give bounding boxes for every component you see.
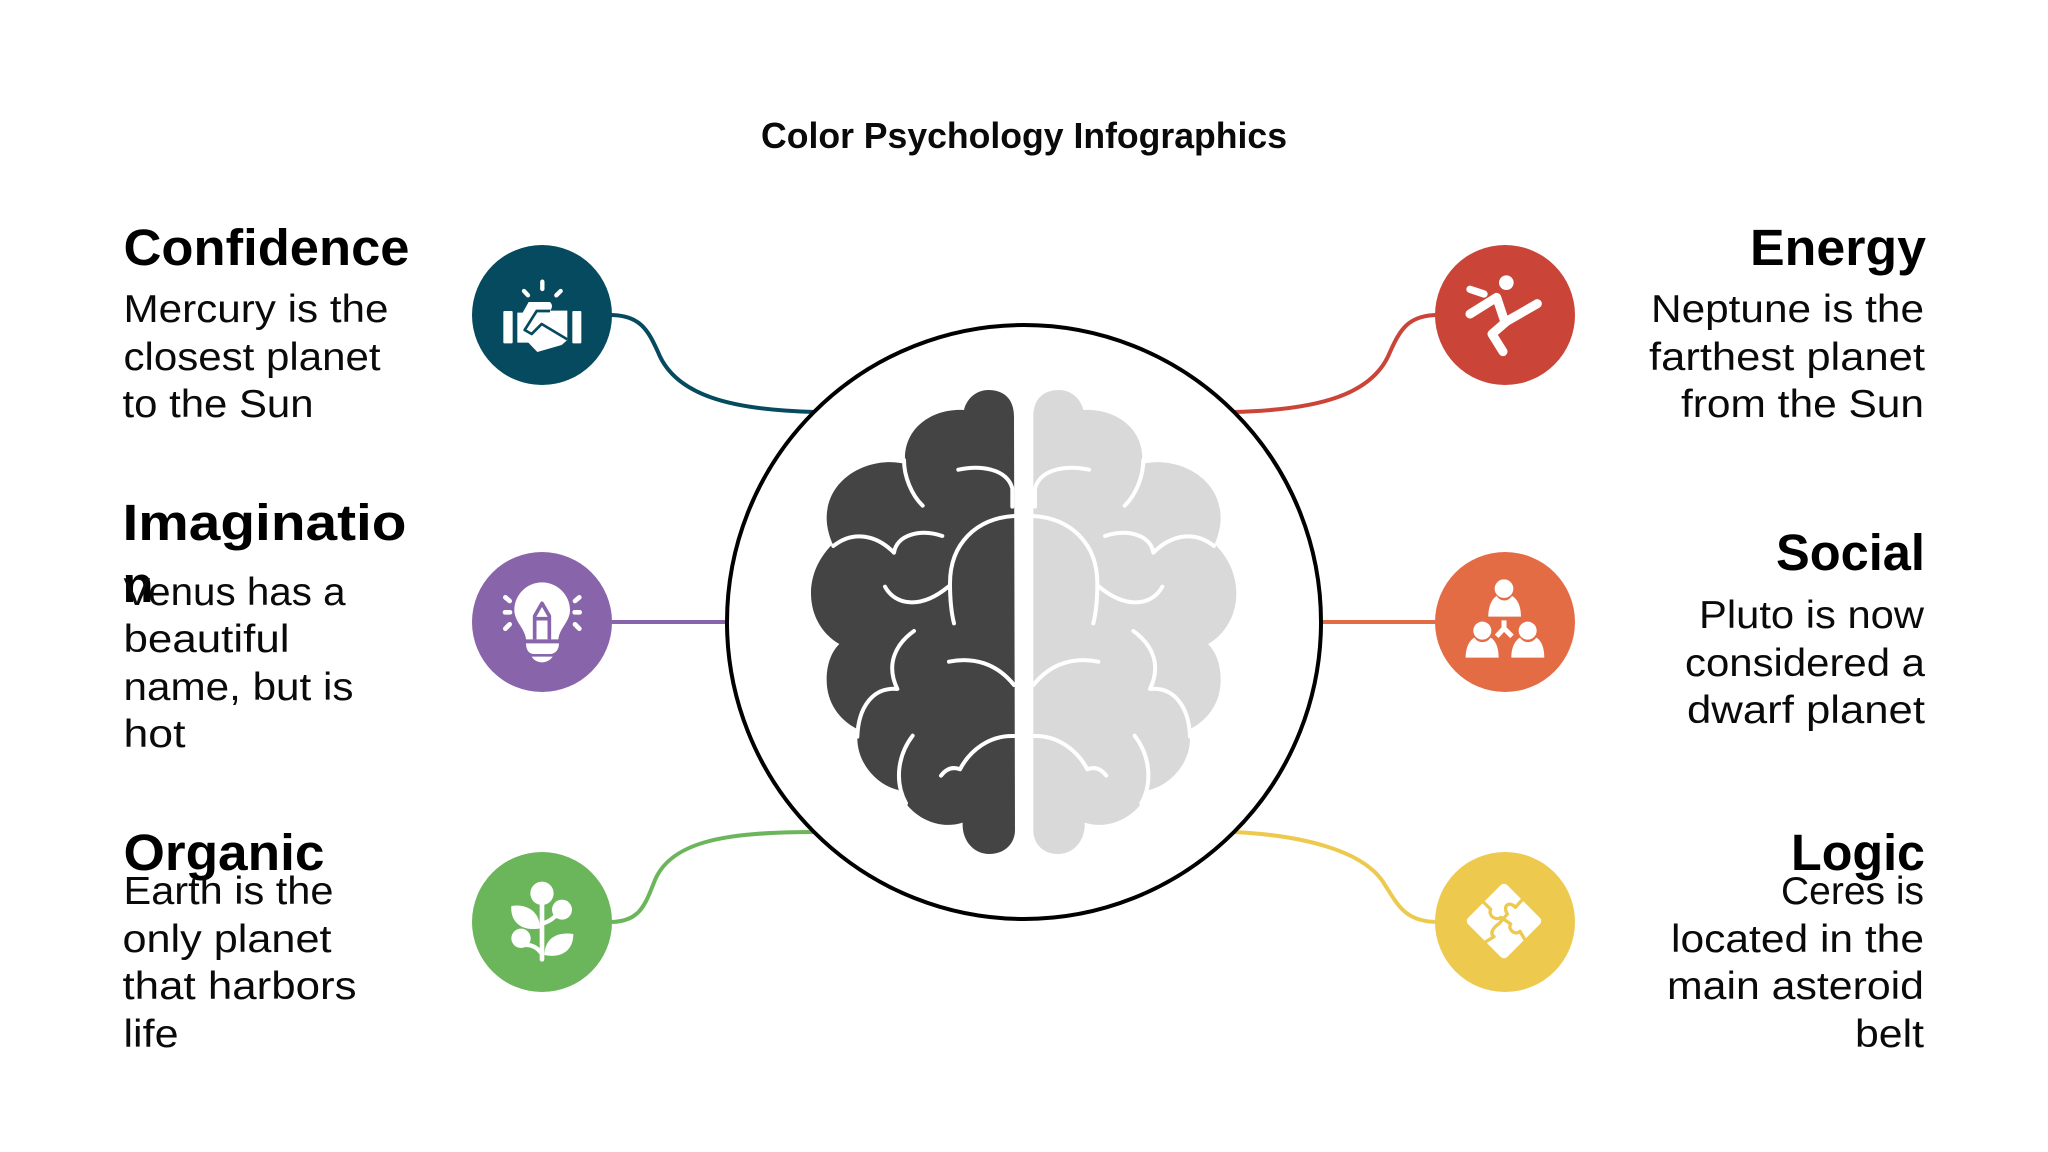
icon: light bulb with pencil xyxy=(472,552,612,692)
body: Pluto xyxy=(1685,594,1925,732)
text block: Energy xyxy=(1649,219,1927,426)
body: Neptune: Neptune is the xyxy=(1651,288,1924,331)
body: Venus: name, but is xyxy=(124,666,354,709)
connector: purple xyxy=(610,620,728,624)
body: Mercury xyxy=(122,288,388,426)
icon: handshake xyxy=(472,245,612,385)
icon: running figure xyxy=(1435,245,1575,385)
connector: yellow xyxy=(1233,832,1438,922)
body: Neptune: farthest planet xyxy=(1649,336,1925,379)
text block: Logic xyxy=(1667,824,1925,1056)
central circle xyxy=(727,325,1321,919)
body: Venus: beautiful xyxy=(124,618,290,661)
body: Ceres: located in the xyxy=(1671,918,1924,961)
body: Venus: Venus has a xyxy=(124,571,346,614)
body: Earth: life xyxy=(124,1013,178,1056)
body: Pluto: dwarf planet xyxy=(1687,689,1925,732)
body: Neptune: from the Sun xyxy=(1681,383,1924,426)
body: Mercury: to the Sun xyxy=(122,383,314,426)
body: Ceres xyxy=(1667,870,1924,1056)
body: Ceres: Ceres is xyxy=(1781,870,1924,913)
brain: left hemisphere xyxy=(811,390,1015,854)
heading: Imagination: n xyxy=(122,556,154,613)
heading: Logic: Logic xyxy=(1791,824,1925,881)
heading: Imagination xyxy=(122,494,406,613)
body: Ceres: main asteroid xyxy=(1667,965,1924,1008)
connector: teal xyxy=(610,315,815,412)
body: Ceres: belt xyxy=(1855,1013,1924,1056)
body: Venus xyxy=(124,571,354,756)
icon: plant xyxy=(472,852,612,992)
brain: right hemisphere xyxy=(1033,390,1236,854)
heading: Organic: Organic xyxy=(124,824,324,881)
body: Mercury: closest planet xyxy=(124,336,381,379)
body: Mercury: Mercury is the xyxy=(124,288,388,331)
body: Earth xyxy=(122,870,356,1056)
icon: puzzle xyxy=(1435,852,1575,992)
body: Pluto: Pluto is now xyxy=(1699,594,1925,637)
body: Earth: only planet xyxy=(122,918,332,961)
brain xyxy=(811,390,1236,854)
body: Neptune xyxy=(1649,288,1925,426)
heading: Confidence: Confidence xyxy=(124,219,410,276)
body: Earth: that harbors xyxy=(122,965,356,1008)
connector: green xyxy=(610,832,815,922)
text block: Organic xyxy=(122,824,356,1056)
body: Venus: hot xyxy=(124,713,186,756)
heading: Imagination: Imaginatio xyxy=(122,494,406,551)
heading: Energy: Energy xyxy=(1750,219,1927,276)
text block: Confidence xyxy=(122,219,410,426)
connector: red xyxy=(1233,315,1438,412)
body: Pluto: considered a xyxy=(1685,642,1925,685)
heading: Social: Social xyxy=(1776,524,1925,581)
connector: orange xyxy=(1320,620,1438,624)
body: Earth: Earth is the xyxy=(124,870,334,913)
icon: people network xyxy=(1435,552,1575,692)
title: Color Psychology Infographics xyxy=(761,115,1287,156)
text block: Imagination xyxy=(122,494,406,756)
text block: Social xyxy=(1685,524,1925,732)
